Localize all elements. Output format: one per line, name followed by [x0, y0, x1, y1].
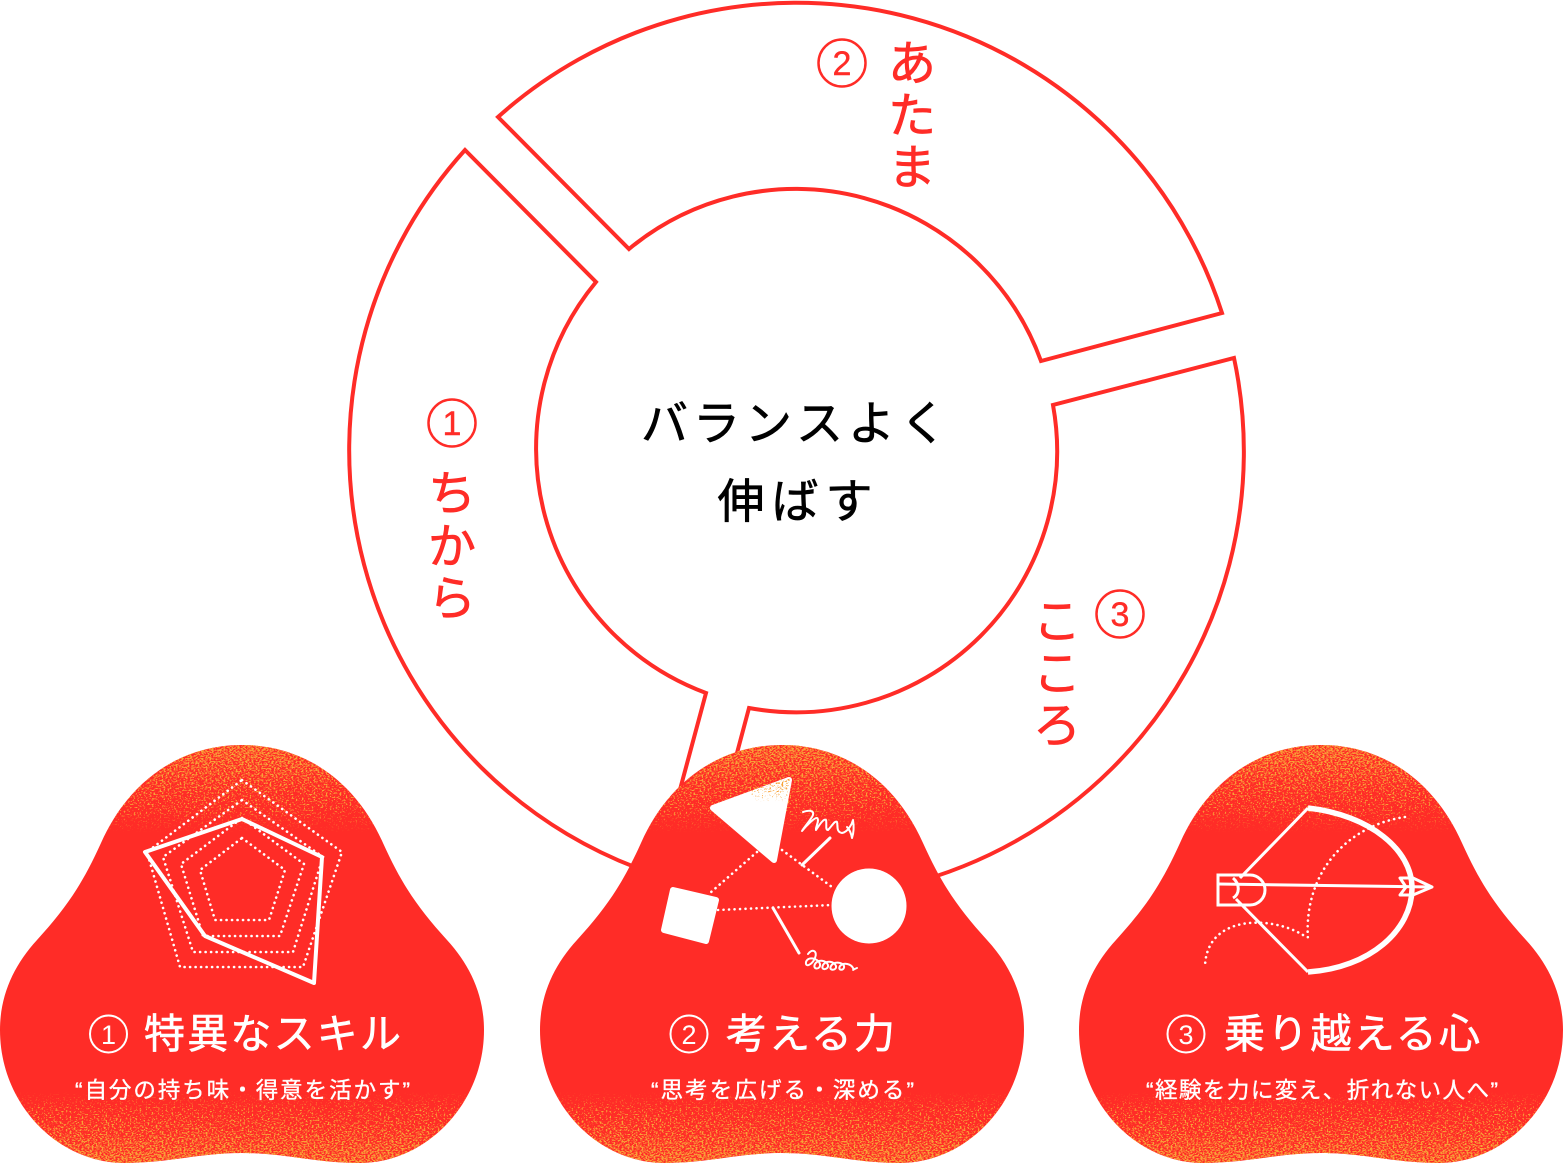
label: ② あたま: あ [888, 38, 936, 91]
label: ① ちから: か [428, 521, 476, 574]
ring segment 3: こころ [701, 358, 1244, 898]
label: ③ こころ: 3 [1111, 596, 1129, 634]
panel: 特異なスキル [0, 745, 484, 1163]
label: ③ こころ [1033, 590, 1144, 753]
label: ① ちから: ち [428, 468, 476, 521]
heading: 考える力 [726, 1011, 895, 1057]
center title: 伸ばす [718, 475, 872, 528]
subtitle: “経験を力に変え、折れない人へ” [1146, 1078, 1498, 1103]
label: ② あたま: た [888, 90, 936, 143]
icon: bow and arrow [1205, 808, 1432, 972]
label: ③ こころ: こ [1033, 596, 1081, 649]
ring segment 2: あたま [498, 3, 1222, 361]
heading: 2 [681, 1020, 697, 1050]
subtitle: “自分の持ち味・得意を活かす” [75, 1078, 410, 1103]
label: ② あたま: 2 [833, 45, 851, 83]
label: ② あたま: ま [888, 142, 936, 195]
label: ① ちから: 1 [443, 405, 461, 443]
label: ② あたま [818, 38, 936, 195]
center title [641, 397, 947, 528]
panel: 考える力 [540, 745, 1024, 1163]
label: ① ちから: ら [428, 573, 476, 626]
icon: shapes network [664, 778, 906, 970]
heading: 乗り越える心 [1224, 1011, 1480, 1057]
center title: バランスよく [641, 397, 947, 450]
heading: 特異なスキル [144, 1011, 401, 1057]
subtitle: “思考を広げる・深める” [651, 1078, 914, 1103]
label: ① ちから [428, 400, 476, 626]
panel: 乗り越える心 [1079, 745, 1563, 1163]
ring diagram [349, 3, 1244, 898]
label: ③ こころ: ろ [1033, 700, 1081, 753]
blob background [1079, 745, 1563, 1163]
heading: 3 [1178, 1020, 1194, 1050]
label: ③ こころ: こ [1033, 648, 1081, 701]
blob background [0, 745, 484, 1163]
icon: radar chart [145, 780, 342, 983]
blob background [540, 745, 1024, 1163]
heading: 1 [101, 1020, 116, 1050]
ring segment 1: ちから [349, 150, 706, 875]
